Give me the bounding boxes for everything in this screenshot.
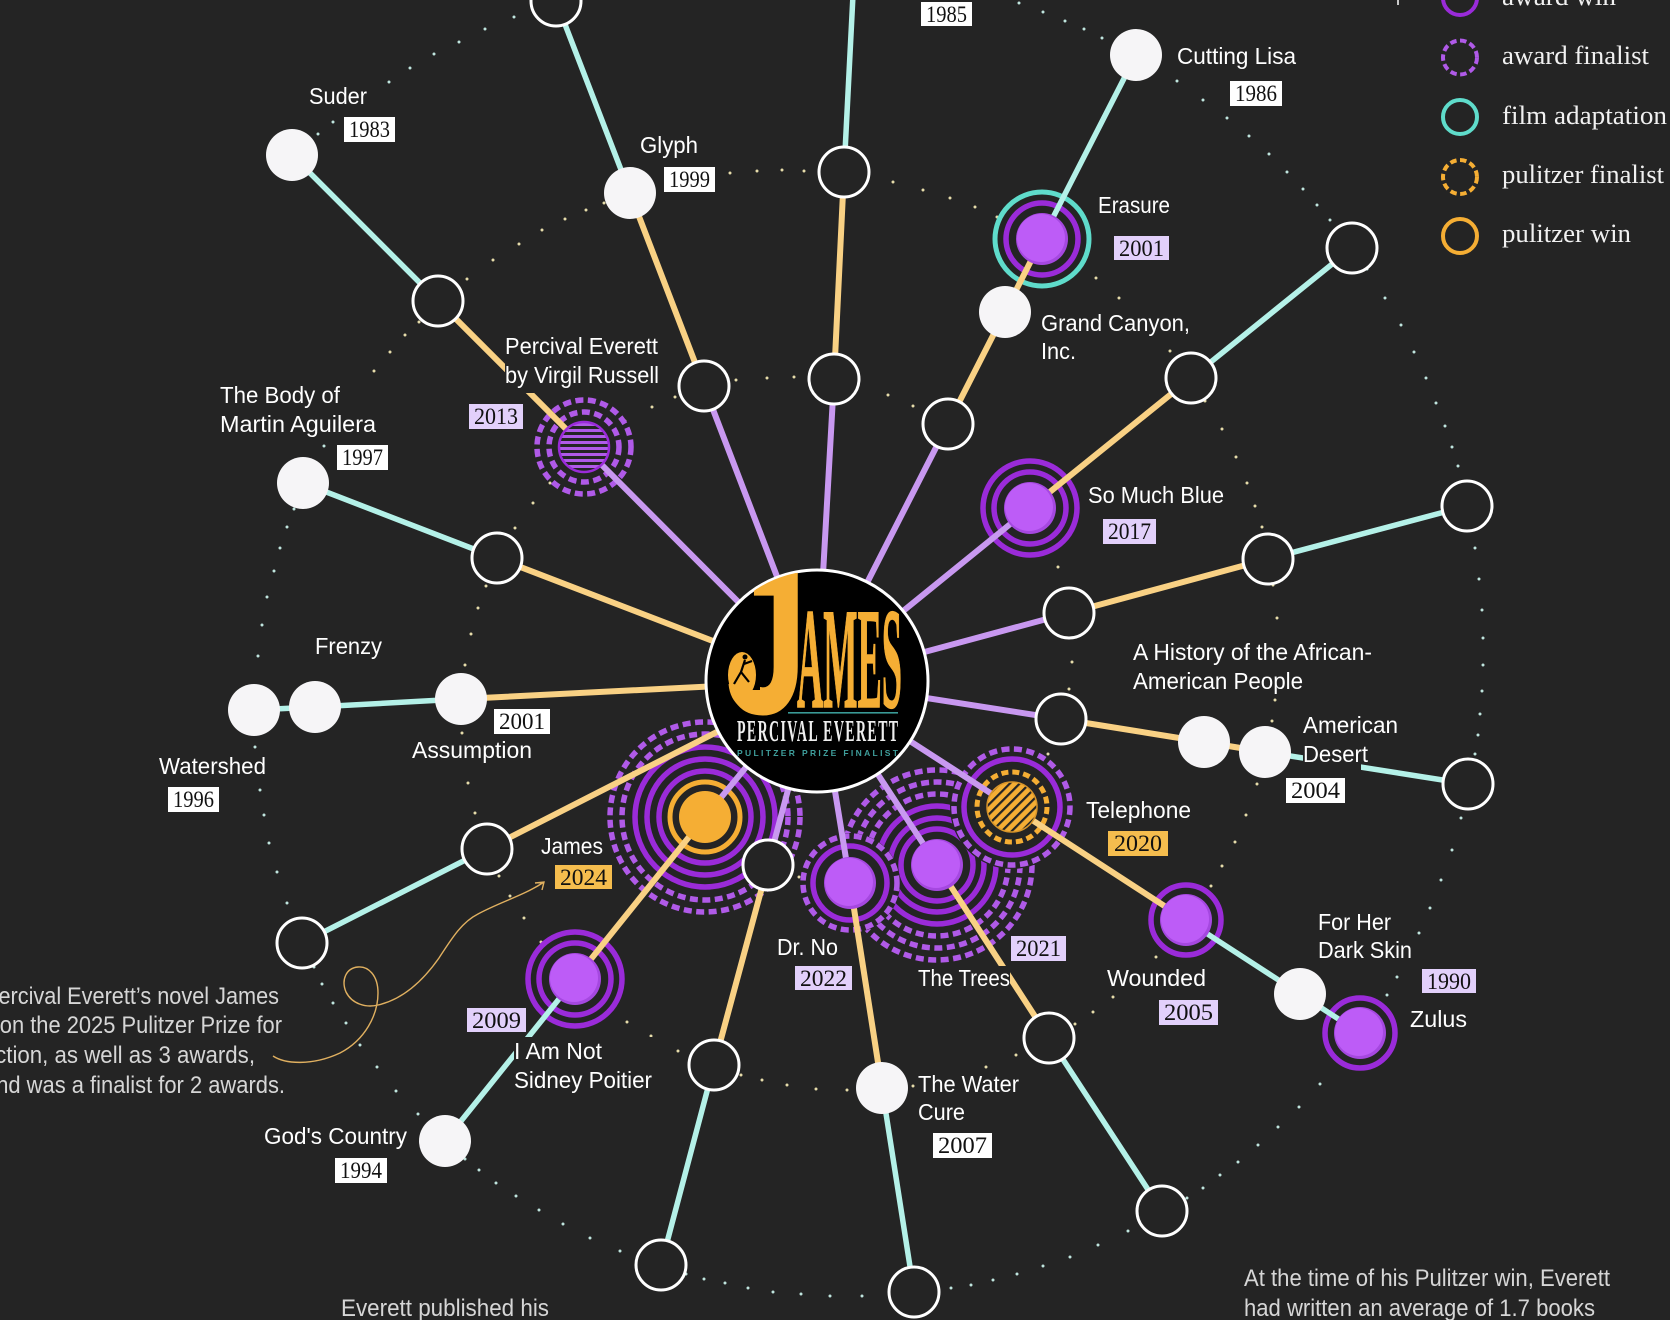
- book: American Desert: 2004: [1291, 778, 1341, 803]
- book: God's Country: God's Country: [264, 1123, 407, 1149]
- author name: PERCIVAL EVERETT: [737, 715, 898, 749]
- book: For Her Dark Skin: For Her: [1318, 909, 1391, 935]
- book: Grand Canyon, Inc.: Inc.: [1041, 338, 1076, 364]
- book: The Trees: 2021: [1016, 936, 1061, 961]
- book: Suder: Suder: [309, 83, 367, 109]
- book: The Water Cure: The Water: [918, 1071, 1019, 1097]
- book: Erasure: Erasure: [1098, 192, 1170, 218]
- book: Dr. No: [777, 857, 876, 991]
- arrow: curl to James: [273, 882, 544, 1062]
- book: Frenzy: Frenzy: [315, 633, 382, 659]
- legend item: pulitzer finalist: pulitzer finalist: [1502, 160, 1665, 189]
- outer dotted ring: [255, 3, 1483, 1296]
- book: A History of the African-American People: A History of the African-: [1133, 639, 1372, 665]
- book: I Am Not Sidney Poitier: Sidney Poitier: [514, 1067, 652, 1093]
- text: AMES: [797, 580, 902, 739]
- book: I Am Not Sidney Poitier: 2009: [472, 1008, 521, 1033]
- annotation: average books: At the time of his Pulitzer win, Everett: [1244, 1265, 1610, 1292]
- book: Assumption: Assumption: [412, 737, 532, 763]
- award ring: Wounded: [1151, 885, 1221, 955]
- book: Grand Canyon, Inc.: Grand Canyon,: [1041, 310, 1190, 336]
- connecting lines: film adaptation links: [254, 0, 1468, 1292]
- book: Frenzy: [289, 633, 382, 733]
- legend item: pulitzer win: [1443, 219, 1631, 253]
- award rings: Dr. No: [800, 833, 900, 933]
- book: Wounded: Wounded: [1107, 965, 1206, 991]
- award rings: Percival Everett by Virgil Russell: [537, 400, 631, 494]
- book: Erasure: 2001: [1119, 236, 1164, 261]
- book: So Much Blue: [1004, 482, 1224, 544]
- book: Dr. No: Dr. No: [777, 934, 838, 960]
- book: Percival Everett by Virgil Russell: Percival Everett: [505, 333, 659, 359]
- book: Glyph: [604, 132, 715, 219]
- book: The Body of Martin Aguilera: Martin Aguilera: [220, 411, 376, 437]
- legend: [1398, 0, 1667, 253]
- book: James: James: [541, 833, 603, 859]
- book: Glyph: Glyph: [640, 132, 698, 158]
- award rings: So Much Blue: [983, 461, 1077, 555]
- book: God's Country: 1994: [340, 1158, 382, 1183]
- book: Telephone: Telephone: [1086, 797, 1191, 823]
- book: Dr. No: 2022: [800, 966, 847, 991]
- book: Glyph: 1999: [669, 167, 710, 192]
- book: The Trees: [911, 839, 1066, 995]
- book: James: 2024: [560, 865, 608, 890]
- award rings: Telephone: [950, 745, 1074, 869]
- book: For Her Dark Skin: 1990: [1427, 969, 1471, 994]
- legend item: award finalist: award finalist: [1502, 41, 1650, 70]
- book: The Body of Martin Aguilera: [220, 382, 388, 509]
- book: James: [541, 791, 731, 890]
- book: Suder: [266, 83, 395, 181]
- book: Watershed: [159, 684, 280, 812]
- annotation: pulitzer summary: [0, 983, 285, 1099]
- annotation: average books: [1244, 1265, 1610, 1320]
- book: The Water Cure: Cure: [918, 1099, 965, 1125]
- pulitzer prize finalist line: PULITZER PRIZE FINALIST: [737, 748, 899, 758]
- award ring: Zulus: [1325, 998, 1395, 1068]
- award rings: Erasure: [995, 192, 1089, 286]
- book: A History of the African-American People: [1133, 639, 1372, 768]
- book: For Her Dark Skin: Dark Skin: [1318, 937, 1412, 963]
- book: Telephone: [987, 782, 1191, 856]
- book: Watershed: 1996: [173, 787, 214, 812]
- book: American Desert: [1239, 712, 1398, 803]
- divider rule: [788, 712, 898, 714]
- book: So Much Blue: 2017: [1108, 519, 1151, 544]
- book: I Am Not Sidney Poitier: I Am Not: [514, 1038, 603, 1064]
- inner dotted ring: [374, 170, 1277, 1090]
- legend item: pulitzer finalist: [1443, 160, 1665, 194]
- book: The Trees: The Trees: [918, 965, 1010, 991]
- book: American Desert: American: [1303, 712, 1398, 738]
- legend item: film adaptation: [1443, 100, 1667, 134]
- book: Percival Everett by Virgil Russell: 2013: [474, 404, 518, 429]
- center badge: James cover: [704, 568, 930, 794]
- book: Cutting Lisa: Cutting Lisa: [1177, 43, 1296, 69]
- legend item: award finalist: [1443, 40, 1650, 74]
- book: Wounded: [1107, 894, 1218, 1025]
- book: Grand Canyon, Inc.: [979, 286, 1190, 364]
- legend item: film adaptation: film adaptation: [1502, 101, 1667, 130]
- book: Erasure: [1016, 192, 1170, 265]
- book: Zulus: Zulus: [1410, 1006, 1467, 1032]
- icon: running figure emblem: [728, 652, 767, 712]
- book: The Body of Martin Aguilera: 1997: [342, 445, 383, 470]
- book: For Her Dark Skin: [1274, 909, 1476, 1020]
- book: Percival Everett by Virgil Russell: by Virgil Russell: [505, 362, 659, 388]
- book: Assumption: [412, 673, 550, 763]
- book: American Desert: Desert: [1303, 741, 1369, 767]
- book: The Water Cure: [856, 1062, 1019, 1158]
- book: God's Country: [264, 1115, 471, 1183]
- book: The Water Cure: 2007: [938, 1133, 987, 1158]
- book: Telephone: 2020: [1114, 831, 1162, 856]
- legend item: award win: [1443, 0, 1616, 15]
- award rings: James: [610, 722, 800, 912]
- connecting lines: pulitzer links: [438, 172, 1268, 1088]
- award rings: I Am Not Sidney Poitier: [528, 932, 622, 1026]
- book: Watershed: Watershed: [159, 753, 266, 779]
- book: I Am Not Sidney Poitier: [467, 953, 652, 1096]
- connecting lines: first-level award links: [584, 379, 1069, 883]
- book: Percival Everett by Virgil Russell: [469, 333, 659, 472]
- book: The Body of Martin Aguilera: The Body of: [220, 382, 341, 408]
- title letter J: J: [726, 527, 806, 755]
- book: Zulus: [1334, 1006, 1467, 1059]
- emblem backing: [716, 640, 760, 690]
- book: So Much Blue: So Much Blue: [1088, 482, 1224, 508]
- book: A History of the African-American People: American People: [1133, 668, 1303, 694]
- legend item: pulitzer win: pulitzer win: [1502, 219, 1631, 248]
- award rings: The Trees: [842, 770, 1032, 960]
- book: Assumption: 2001: [499, 709, 545, 734]
- book: Cutting Lisa: [1110, 29, 1296, 106]
- book: Wounded: 2005: [1164, 1000, 1213, 1025]
- year label: 1985: 1985: [926, 2, 967, 27]
- empty nodes: editions and adaptations: [277, 0, 1493, 1317]
- book: Suder: 1983: [349, 117, 390, 142]
- book: Cutting Lisa: 1986: [1235, 81, 1277, 106]
